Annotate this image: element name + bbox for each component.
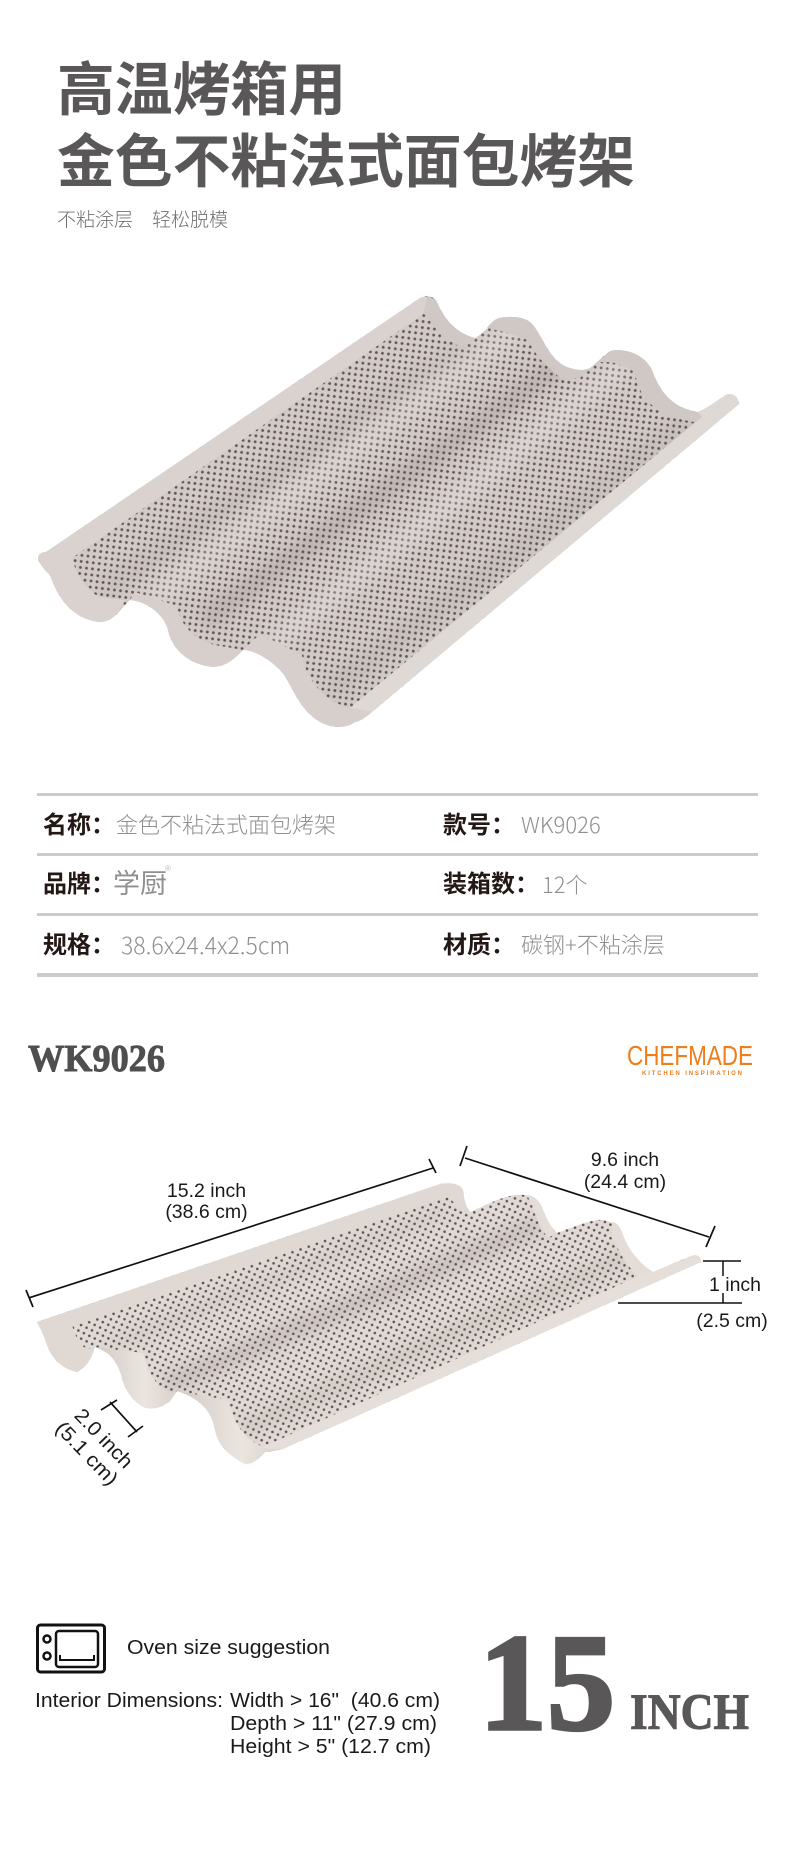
model number: WK9026 <box>28 1038 165 1080</box>
spec: size: 38.6x24.4x2.5cm <box>121 927 290 961</box>
spec: name <box>43 805 336 840</box>
dimension: height: (2.5 cm) <box>696 1310 768 1332</box>
interior dimensions: Depth > 11" (27.9 cm) <box>230 1713 437 1735</box>
right rim <box>350 394 739 712</box>
spec: model: WK9026 <box>521 808 601 840</box>
shading bands <box>163 1217 626 1432</box>
title: 金色不粘法式面包烤架 <box>57 131 635 195</box>
brand logo: CHEFMADE <box>627 1040 753 1077</box>
spec: material: 材质： <box>443 925 515 960</box>
dimension: width: 9.6 inch <box>591 1149 659 1171</box>
second front curve <box>95 1347 177 1408</box>
brand logo: CHEFMADE: CHEFMADE <box>627 1040 753 1071</box>
spec: carton quantity: 装箱数： <box>443 864 539 899</box>
dimension: groove width: 2.0 inch <box>70 1405 137 1473</box>
dimension photo: tray body with perforations <box>37 1183 701 1464</box>
spec: name: 名称： <box>43 805 115 840</box>
dimension: length: 15.2 inch <box>167 1180 246 1202</box>
spec: brand <box>43 862 171 901</box>
spec: material: 碳钢+不粘涂层 <box>521 928 665 960</box>
dimension: height <box>618 1261 768 1332</box>
brand logo: CHEFMADE: KITCHEN INSPIRATION <box>642 1071 742 1077</box>
dimension: width: (24.4 cm) <box>584 1171 666 1193</box>
dimension: length: (38.6 cm) <box>165 1201 248 1223</box>
product photo: perforated baguette tray <box>38 296 739 727</box>
spec: model <box>443 805 601 840</box>
back curve one <box>423 296 475 348</box>
title: 高温烤箱用 <box>57 59 346 123</box>
third front curve <box>243 634 372 727</box>
back curve two <box>527 1195 557 1238</box>
spec: material <box>443 925 665 960</box>
dimension: groove width <box>51 1400 143 1490</box>
dimension: groove width: (5.1 cm) <box>51 1417 122 1490</box>
dimension: height: 1 inch <box>709 1274 761 1296</box>
icon: oven <box>38 1625 104 1672</box>
oven size label: Oven size suggestion <box>127 1637 330 1659</box>
third front curve <box>177 1391 283 1464</box>
interior dimensions: Width > 16" (40.6 cm) <box>230 1690 440 1712</box>
title <box>57 59 635 195</box>
dimension: length <box>26 1159 436 1307</box>
spec: name: 金色不粘法式面包烤架 <box>116 808 336 840</box>
second front curve <box>130 592 243 667</box>
tray body with perforations <box>38 296 739 727</box>
left rim and first front curve <box>38 297 432 622</box>
spec: model: 款号： <box>443 805 515 840</box>
back curve three <box>612 1222 653 1278</box>
spec: brand: 学厨 <box>113 862 167 901</box>
subtitle: 不粘涂层 轻松脱模 <box>57 205 228 232</box>
back curve two <box>487 317 590 378</box>
big number: 15 inch <box>479 1606 749 1759</box>
spec: size <box>43 925 290 961</box>
spec: size: 规格： <box>43 925 115 960</box>
interior dimensions: Interior Dimensions: <box>35 1690 223 1712</box>
spec: carton quantity: 12个 <box>542 868 588 900</box>
spec: brand: 品牌： <box>43 864 115 899</box>
big number: 15 inch: INCH <box>630 1685 749 1741</box>
back curve three <box>600 350 702 422</box>
spec: carton quantity <box>443 864 588 900</box>
big number: 15 inch: 15 <box>479 1606 615 1759</box>
spec: brand: ® <box>165 864 171 873</box>
top rim and first front curve <box>37 1183 470 1372</box>
right rim <box>263 1255 701 1449</box>
interior dimensions <box>35 1690 440 1758</box>
dimension: width <box>460 1146 715 1247</box>
shading bands <box>105 330 690 690</box>
interior dimensions: Height > 5" (12.7 cm) <box>230 1736 431 1758</box>
spec table <box>37 793 758 977</box>
